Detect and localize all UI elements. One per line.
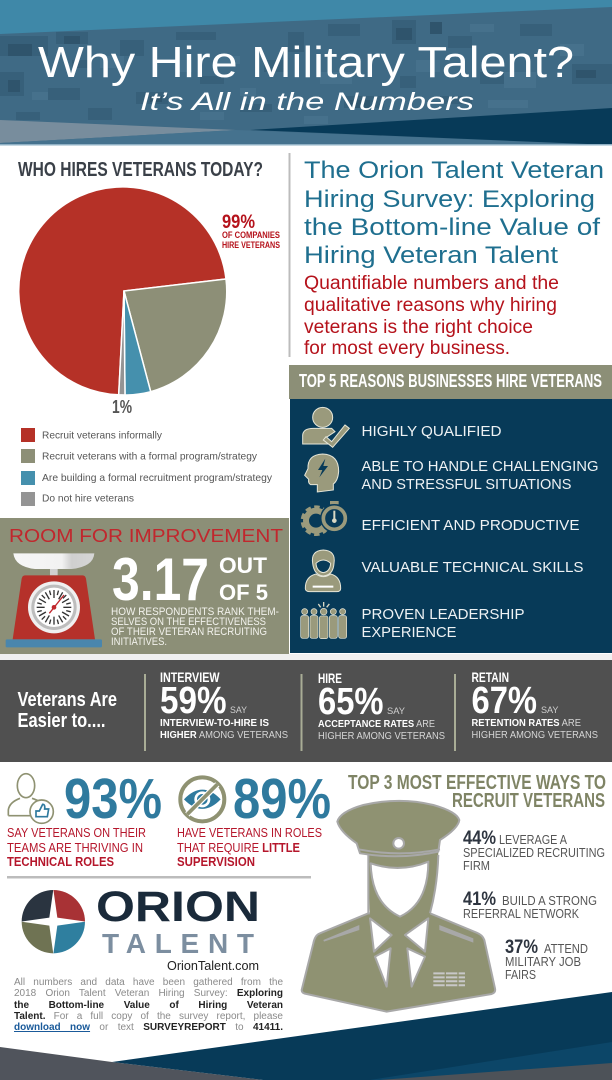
column: retain	[472, 669, 598, 741]
footer shapes	[0, 992, 612, 1080]
icon: person with check	[303, 407, 349, 447]
panel heading	[18, 689, 117, 732]
column: interview	[160, 669, 288, 741]
source note: the Bottom-line Value of Hiring Veteran	[14, 1000, 283, 1010]
column: retain: HIGHER AMONG VETERANS	[472, 729, 598, 741]
panel: top 5 reasons list: HIGHLY QUALIFIED	[362, 423, 502, 440]
column: retain: RETAIN	[472, 669, 509, 685]
icon: gear and stopwatch	[303, 501, 349, 534]
top teal wedge	[0, 0, 612, 34]
stat: out of 5: OUT	[219, 553, 267, 578]
stat: 93 percent: 93%	[64, 767, 162, 831]
source note: All numbers and data have been gathered from the	[14, 977, 283, 988]
icon: head with lightning bolt	[305, 454, 339, 492]
logo wordmark: ORION	[96, 883, 260, 931]
text: little supervision: THAT REQUIRE LITTLE	[177, 840, 300, 855]
stat: 41 percent: REFERRAL NETWORK	[463, 906, 579, 921]
survey description: veterans is the right choice	[304, 317, 533, 338]
survey heading: Hiring Veteran Talent	[304, 242, 558, 269]
panel: top 5 reasons list	[290, 399, 612, 653]
pie legend	[21, 428, 273, 506]
source note: download now or text SURVEYREPORT to 41411.	[14, 1022, 283, 1033]
title: Why Hire Military Talent?	[38, 38, 574, 87]
column: retain: RETENTION RATES ARE	[472, 717, 581, 729]
stat: 37 percent: FAIRS	[505, 967, 536, 982]
column: hire: HIGHER AMONG VETERANS	[318, 730, 445, 742]
stat description: INITIATIVES.	[111, 636, 167, 648]
logo wordmark	[96, 883, 260, 959]
pie chart	[19, 187, 227, 395]
column: interview: 59%	[160, 680, 226, 722]
text: thriving in technical roles: TECHNICAL ROLES	[7, 854, 114, 869]
panel: top 5 reasons list: VALUABLE TECHNICAL SKILLS	[362, 559, 584, 576]
stat: 44 percent: FIRM	[463, 858, 490, 873]
survey description: qualitative reasons why hiring	[304, 295, 557, 316]
stat: 41 percent: BUILD A STRONG	[502, 893, 597, 908]
survey heading: the Bottom-line Value of	[304, 214, 600, 241]
icon: mechanic	[305, 550, 341, 592]
column: retain: 67%	[472, 680, 537, 722]
pie legend: Do not hire veterans	[42, 492, 134, 504]
panel: top 5 reasons list: PROVEN LEADERSHIP	[362, 606, 524, 623]
subtitle: It’s All in the Numbers	[140, 88, 474, 116]
lower right navy wedge	[250, 108, 612, 145]
callout: 99 percent: 99%	[222, 212, 255, 233]
column: hire: SAY	[387, 706, 406, 717]
callout: 99 percent: OF COMPANIES	[222, 230, 280, 241]
callout: 99 percent: HIRE VETERANS	[222, 240, 280, 251]
heading: top 3 ways	[348, 772, 606, 812]
stat: 3.17: 3.17	[112, 546, 209, 613]
text: thriving in technical roles: TEAMS ARE THRIVING IN	[7, 840, 143, 855]
stat: 37 percent: MILITARY JOB	[505, 954, 581, 969]
panel heading: Veterans Are	[18, 689, 117, 711]
text: little supervision: SUPERVISION	[177, 854, 255, 869]
heading: room for improvement: ROOM FOR IMPROVEMENT	[9, 525, 283, 546]
panel: top 5 reasons list: EFFICIENT AND PRODUCTIVE	[362, 517, 580, 534]
text: little supervision	[177, 825, 322, 869]
stat: 37 percent: ATTEND	[544, 941, 588, 956]
callout: 1 percent: 1%	[112, 397, 132, 417]
pie legend: Recruit veterans with a formal program/strategy	[42, 450, 258, 462]
stat: 44 percent: 44%	[463, 828, 496, 849]
text: little supervision: HAVE VETERANS IN ROLES	[177, 825, 322, 840]
panel: top 5 reasons list: ABLE TO HANDLE CHALLENGING	[362, 458, 598, 475]
text: thriving in technical roles: SAY VETERANS ON THEIR	[7, 825, 146, 840]
source note: Talent. For a full copy of the survey report, please	[14, 1011, 283, 1022]
panel: top 5 reasons list: AND STRESSFUL SITUATIONS	[362, 476, 572, 493]
column: hire	[318, 670, 445, 742]
panel heading: Easier to....	[18, 710, 106, 732]
column: retain: SAY	[541, 705, 559, 716]
logo: orion compass mark	[21, 889, 86, 954]
stat: 44 percent	[463, 828, 605, 873]
illustration: soldier	[302, 801, 495, 1012]
panel: veterans are easier to	[0, 660, 612, 762]
column: interview: INTERVIEW	[160, 669, 220, 685]
survey heading	[304, 157, 604, 269]
survey description: Quantifiable numbers and the	[304, 273, 559, 294]
column: interview: INTERVIEW-TO-HIRE IS	[160, 717, 269, 729]
panel: room for improvement	[0, 518, 289, 654]
stat: 44 percent: LEVERAGE A	[499, 832, 567, 847]
logo wordmark: TALENT	[102, 928, 254, 959]
survey heading: Hiring Survey: Exploring	[304, 186, 595, 213]
source note	[14, 977, 283, 1033]
icon: kitchen scale	[6, 553, 102, 647]
lower left grey wedge	[0, 120, 236, 143]
pie legend: Are building a formal recruitment program/strategy	[42, 472, 273, 484]
column: hire: 65%	[318, 681, 384, 723]
column: hire: HIRE	[318, 670, 342, 686]
stat description: HOW RESPONDENTS RANK THEM-	[111, 606, 279, 618]
header banner	[0, 0, 612, 146]
text: thriving in technical roles	[7, 825, 146, 869]
stat description: OF THEIR VETERAN RECRUITING	[111, 626, 267, 638]
survey heading: The Orion Talent Veteran	[304, 157, 604, 184]
stat: 89 percent: 89%	[233, 767, 331, 831]
stat: 37 percent	[505, 937, 588, 982]
icon: person with thumbs up	[8, 774, 53, 823]
source note: 2018 Orion Talent Veteran Hiring Survey: Exploring	[14, 988, 283, 999]
survey description: for most every business.	[304, 338, 510, 359]
column: interview: HIGHER AMONG VETERANS	[160, 729, 288, 741]
callout: 99 percent	[222, 212, 280, 251]
stat description	[111, 606, 279, 648]
panel: top 5 reasons list: EXPERIENCE	[362, 624, 456, 641]
stat: 41 percent	[463, 889, 597, 921]
stat description: SELVES ON THE EFFECTIVENESS	[111, 616, 266, 628]
icon: leadership group	[301, 602, 347, 639]
website: OrionTalent.com	[167, 959, 259, 973]
stat: 41 percent: 41%	[463, 889, 496, 910]
pie legend: Recruit veterans informally	[42, 430, 163, 442]
icon: crossed out eye	[180, 777, 224, 821]
column: interview: SAY	[230, 705, 248, 716]
heading: who hires veterans: WHO HIRES VETERANS TODAY?	[18, 159, 263, 181]
column: hire: ACCEPTANCE RATES ARE	[318, 718, 435, 730]
survey description	[304, 273, 559, 359]
panel: top 5 reasons heading	[289, 365, 612, 399]
stat: 37 percent: 37%	[505, 937, 538, 958]
stat: out of 5	[219, 553, 268, 605]
stat: out of 5: OF 5	[219, 580, 268, 605]
